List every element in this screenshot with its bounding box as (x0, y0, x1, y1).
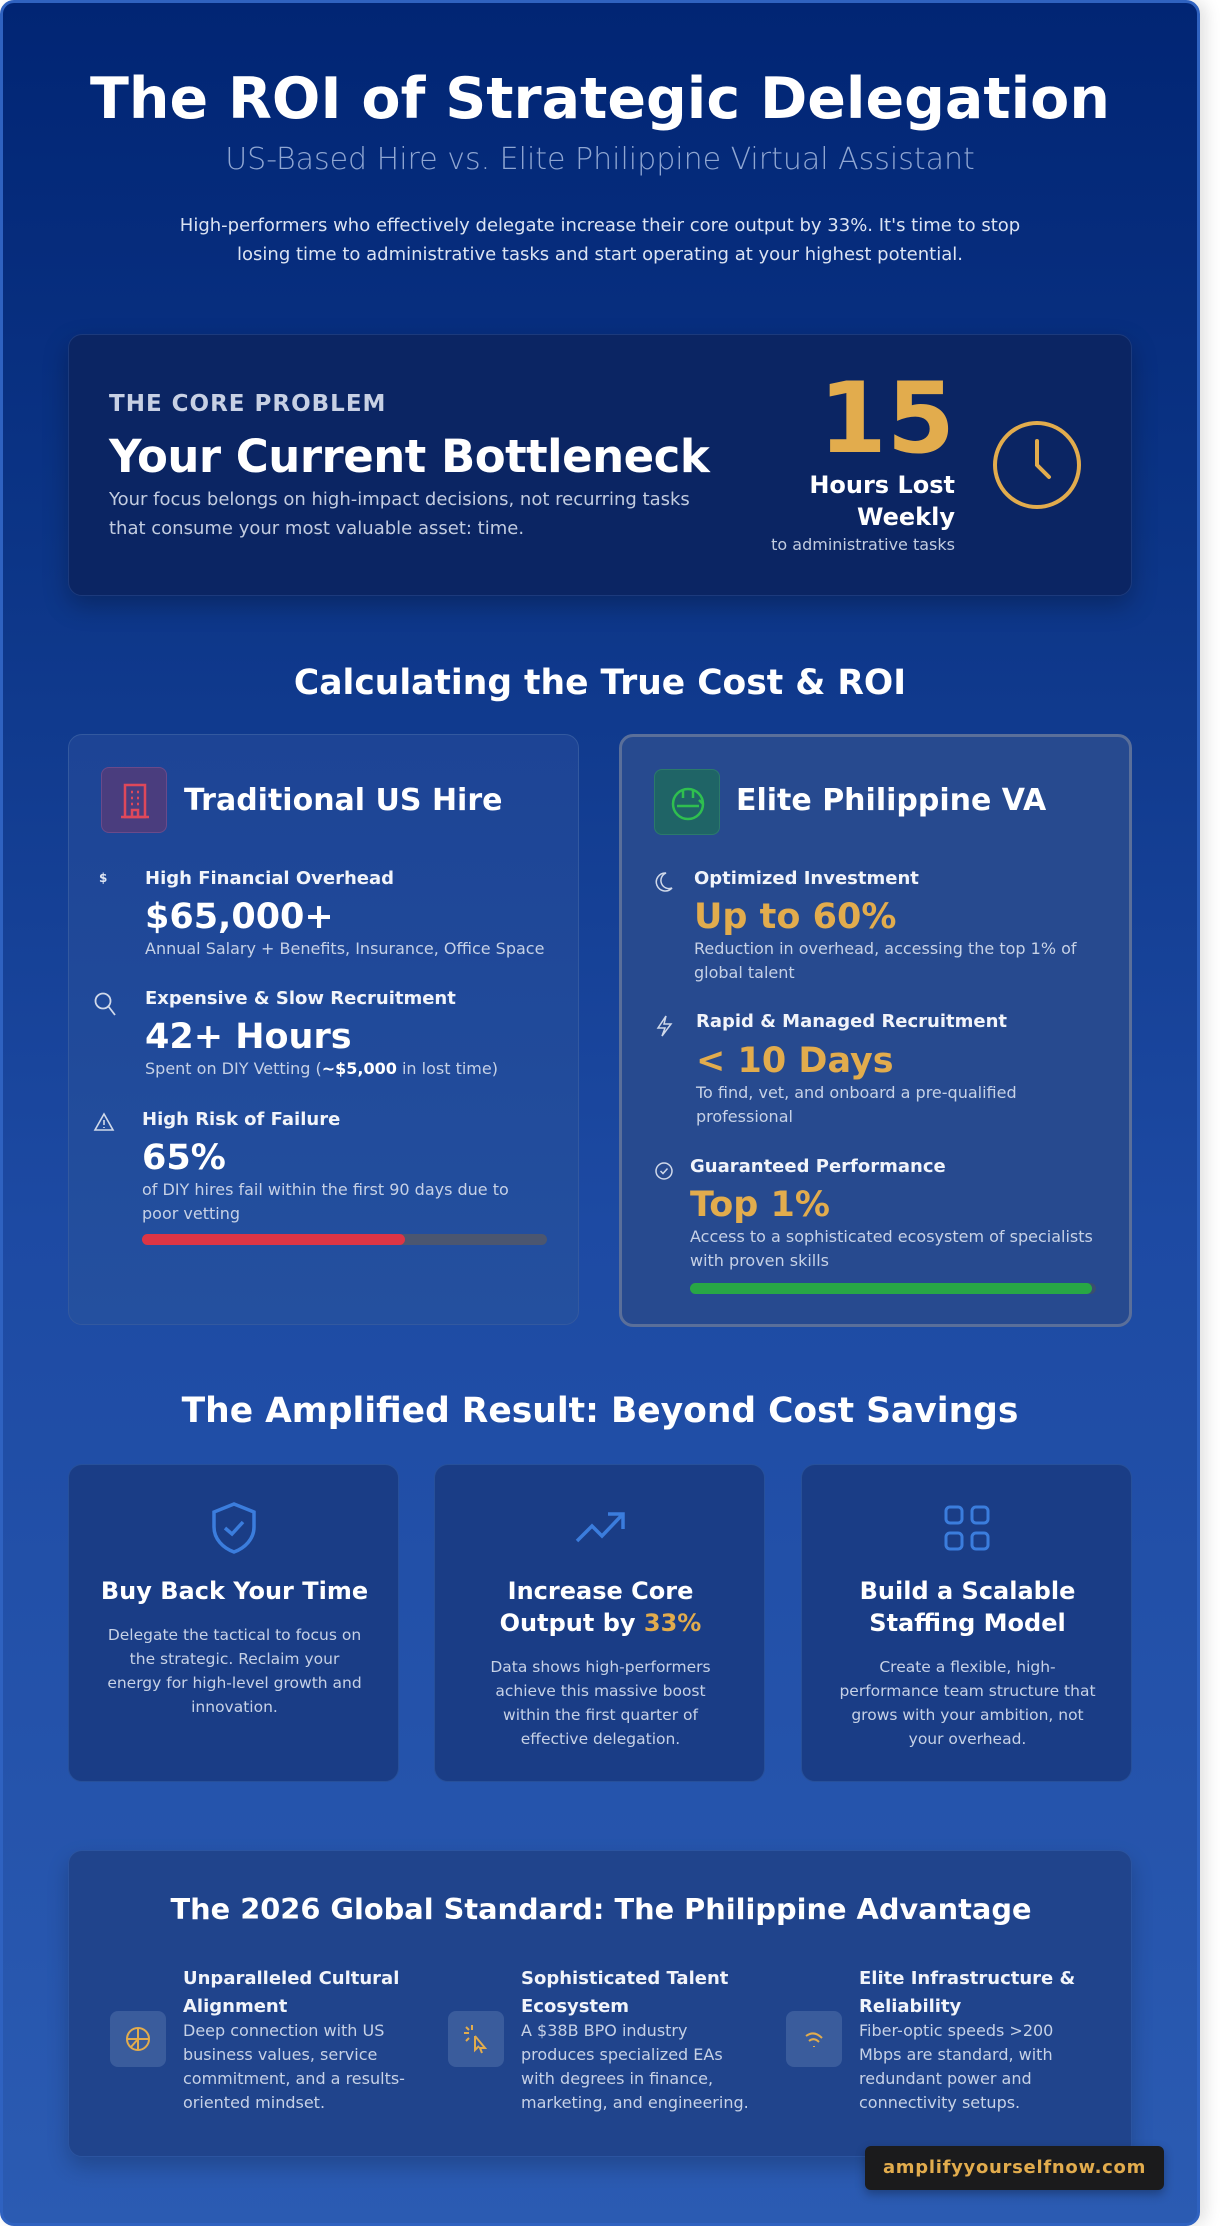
item: cultural alignment: Deep connection with US business values, service commitment, and a results-oriented mindset. (183, 2021, 405, 2112)
item: talent ecosystem: A $38B BPO industry produces specialized EAs with degrees in finance, marketing, and engineering. (521, 2021, 749, 2112)
heading: Traditional US Hire (184, 783, 502, 818)
title: The ROI of Strategic Delegation (90, 66, 1110, 132)
item: cultural alignment (110, 1968, 405, 2112)
item: recruitment: Spent on DIY Vetting (~$5,000 in lost time) (145, 1059, 498, 1078)
icon: grid (944, 1506, 990, 1550)
item: rapid recruitment: To find, vet, and onboard a pre-qualified professional (696, 1083, 1017, 1126)
item: rapid recruitment (656, 1011, 1017, 1126)
item: recruitment (94, 988, 498, 1078)
item: rapid recruitment: < 10 Days (696, 1041, 894, 1081)
title: Increase Core (508, 1577, 693, 1605)
icon: wifi (786, 2011, 842, 2067)
panel: elite philippine VA (619, 734, 1132, 1327)
intro text: High-performers who effectively delegate increase their core output by 33%. It's time to stop losing time to administrative tasks and start operating at your highest potential. (180, 215, 1020, 265)
icon: globe (110, 2011, 166, 2067)
item: guaranteed performance: Top 1% (690, 1185, 830, 1225)
icon: clock (993, 421, 1081, 509)
description: Delegate the tactical to focus on the strategic. Reclaim your energy for high-level growth and innovation. (107, 1626, 362, 1716)
eyebrow: THE CORE PROBLEM (109, 391, 386, 417)
heading: Your Current Bottleneck (109, 430, 709, 483)
panel: core problem (68, 334, 1132, 596)
icon: building (101, 767, 167, 833)
stat: 15 hours: Weekly (857, 503, 955, 531)
item: infrastructure: Fiber-optic speeds >200 Mbps are standard, with redundant power and connectivity setups. (859, 2021, 1053, 2112)
item: financial overhead: High Financial Overhead (145, 868, 394, 889)
item: risk of failure (94, 1109, 547, 1245)
panel: philippine advantage (68, 1850, 1132, 2157)
footer badge (865, 2146, 1164, 2190)
item: financial overhead: Annual Salary + Benefits, Insurance, Office Space (145, 939, 544, 958)
stat: 15 hours: Hours Lost (809, 471, 955, 499)
item: financial overhead: $ (99, 871, 107, 885)
title: Build a Scalable (860, 1577, 1075, 1605)
card: buy back time (68, 1464, 399, 1782)
icon: trending up (576, 1512, 625, 1542)
title: Staffing Model (869, 1609, 1066, 1637)
title (860, 1577, 1075, 1637)
item: optimized investment: Optimized Investment (694, 868, 919, 889)
description: Data shows high-performers achieve this massive boost within the first quarter of effective delegation. (490, 1658, 711, 1748)
item: risk of failure: 65% (142, 1138, 226, 1178)
description: Your focus belongs on high-impact decisions, not recurring tasks that consume your most valuable asset: time. (109, 489, 690, 539)
icon: shield (212, 1502, 256, 1554)
description: Create a flexible, high-performance team structure that grows with your ambition, not your overhead. (839, 1658, 1096, 1748)
footer badge: amplifyyourselfnow.com (883, 2157, 1146, 2178)
bar: full (690, 1283, 1096, 1294)
item: financial overhead (99, 868, 544, 958)
item: rapid recruitment: Rapid & Managed Recruitment (696, 1011, 1007, 1032)
icon: cursor click (448, 2011, 504, 2067)
item: infrastructure (786, 1968, 1075, 2112)
panel: traditional US hire (68, 734, 579, 1325)
item: guaranteed performance: Access to a sophisticated ecosystem of specialists with proven skills (690, 1227, 1093, 1270)
item: financial overhead: $65,000+ (145, 897, 334, 937)
heading: The 2026 Global Standard: The Philippine Advantage (171, 1892, 1031, 1926)
item: talent ecosystem: Sophisticated Talent Ecosystem (521, 1968, 728, 2017)
bar: 65% (142, 1234, 547, 1245)
title: Output by 33% (500, 1609, 701, 1637)
item: risk of failure: of DIY hires fail within the first 90 days due to poor vetting (142, 1180, 509, 1223)
icon: helmet (654, 769, 720, 835)
item: infrastructure: Elite Infrastructure & Reliability (859, 1968, 1075, 2017)
stat: 15 hours (771, 362, 955, 554)
item: talent ecosystem (448, 1968, 749, 2112)
item: guaranteed performance (655, 1156, 1096, 1294)
stat: 15 hours: 15 (819, 362, 955, 476)
section heading: cost & roi: Calculating the True Cost & ROI (294, 663, 906, 703)
item: recruitment: 42+ Hours (145, 1017, 352, 1057)
item: optimized investment: Up to 60% (694, 897, 896, 937)
title (500, 1577, 701, 1637)
card: increase output (434, 1464, 765, 1782)
item: optimized investment: Reduction in overhead, accessing the top 1% of global talent (694, 939, 1077, 982)
item: cultural alignment: Unparalleled Cultural Alignment (183, 1968, 399, 2017)
item: recruitment: Expensive & Slow Recruitment (145, 988, 456, 1009)
title: Buy Back Your Time (101, 1577, 368, 1605)
stat: 15 hours: to administrative tasks (771, 535, 955, 554)
section heading: amplified result: The Amplified Result: Beyond Cost Savings (182, 1391, 1018, 1431)
item: guaranteed performance: Guaranteed Performance (690, 1156, 946, 1177)
card: scalable model (801, 1464, 1132, 1782)
heading: Elite Philippine VA (736, 783, 1046, 818)
item: optimized investment (656, 868, 1077, 982)
subtitle: US-Based Hire vs. Elite Philippine Virtual Assistant (225, 142, 975, 177)
item: risk of failure: High Risk of Failure (142, 1109, 340, 1130)
